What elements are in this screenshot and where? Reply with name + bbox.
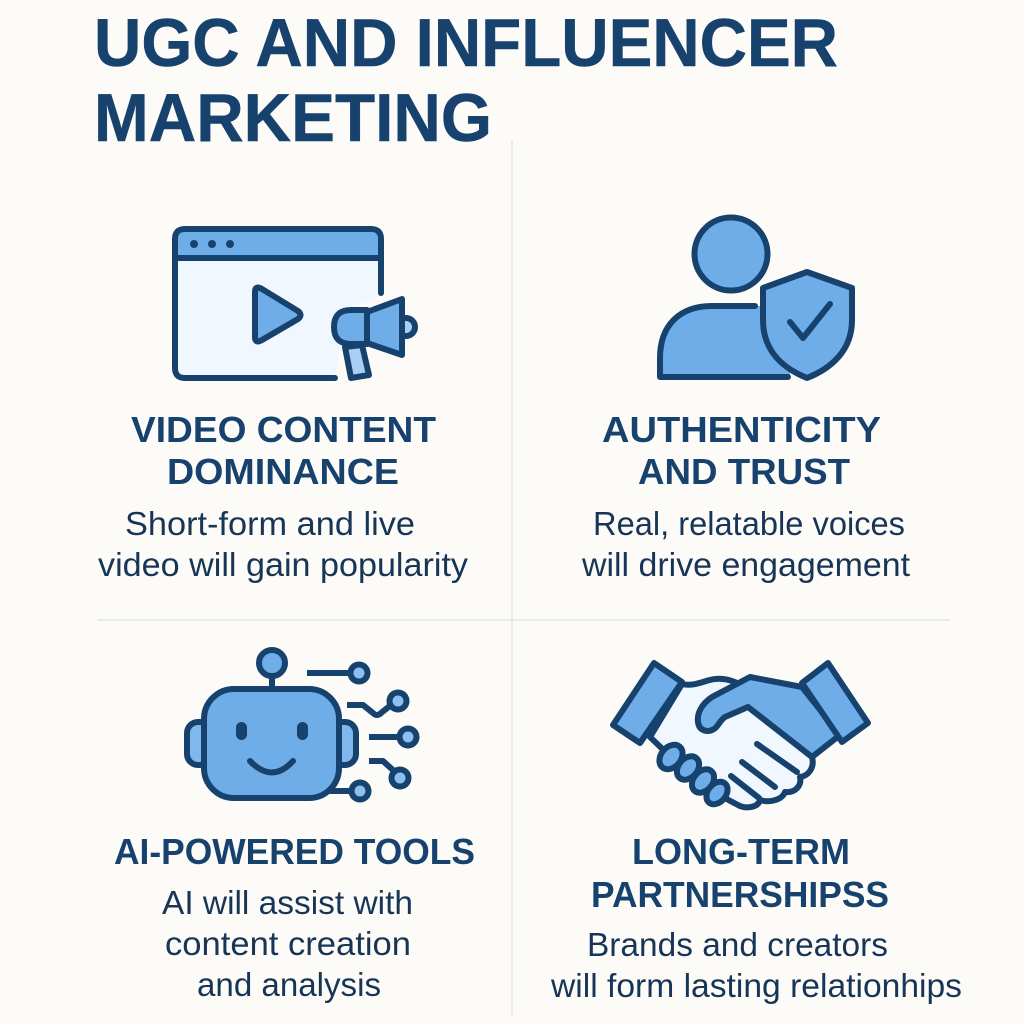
text: video description xyxy=(98,505,469,583)
title xyxy=(94,5,838,156)
text: ai description: and analysis xyxy=(197,966,381,1003)
text: partnerships description xyxy=(550,926,962,1004)
panel: video content dominance xyxy=(98,229,469,583)
heading: video content dominance: VIDEO CONTENT xyxy=(131,409,436,450)
heading: long-term partnerships: PARTNERSHIPSS xyxy=(591,874,889,915)
title: UGC AND INFLUENCER xyxy=(94,5,838,81)
heading: authenticity and trust xyxy=(602,409,881,492)
icon: person with shield xyxy=(660,218,852,378)
heading: long-term partnerships: LONG-TERM xyxy=(632,831,850,872)
panel: long-term partnerships xyxy=(550,663,962,1004)
title: MARKETING xyxy=(94,80,492,156)
text: authenticity description: will drive engagement xyxy=(581,546,910,583)
heading: ai-powered tools: AI-POWERED TOOLS xyxy=(114,831,475,872)
heading: authenticity and trust: AUTHENTICITY xyxy=(602,409,881,450)
icon: video player with megaphone xyxy=(175,229,415,378)
panel: ai-powered tools xyxy=(114,650,475,1003)
heading: video content dominance xyxy=(131,409,436,492)
text: partnerships description: will form lasting relationhips xyxy=(550,967,962,1004)
heading: long-term partnerships xyxy=(591,831,889,915)
text: authenticity description xyxy=(581,505,910,583)
panel: authenticity and trust xyxy=(581,218,910,583)
text: partnerships description: Brands and creators xyxy=(587,926,888,963)
text: ai description: AI will assist with xyxy=(162,884,413,921)
heading: video content dominance: DOMINANCE xyxy=(167,451,399,492)
icon: handshake xyxy=(613,663,868,808)
icon: robot with circuit lines xyxy=(187,650,416,800)
text: authenticity description: Real, relatable voices xyxy=(593,505,905,542)
text: ai description: content creation xyxy=(165,925,411,962)
text: video description: Short-form and live xyxy=(125,505,415,542)
heading: authenticity and trust: AND TRUST xyxy=(638,451,850,492)
text: ai description xyxy=(162,884,413,1003)
text: video description: video will gain popularity xyxy=(98,546,469,583)
